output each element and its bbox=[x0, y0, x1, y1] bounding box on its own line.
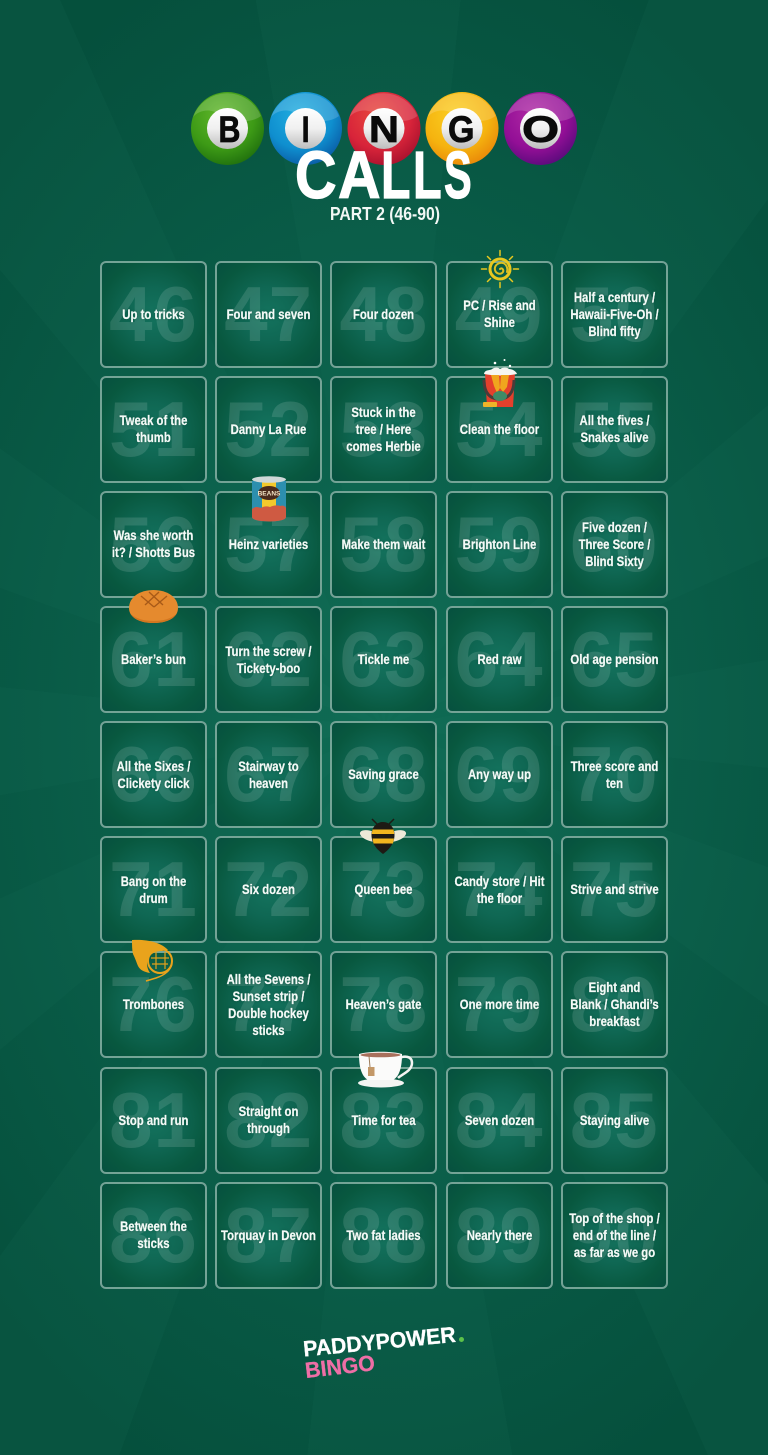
card 68 bbox=[330, 721, 437, 828]
card 48 bbox=[330, 260, 437, 368]
card 86: Between the bbox=[120, 1218, 187, 1234]
heading: calls: L bbox=[381, 138, 410, 213]
card 70: ten bbox=[606, 775, 623, 791]
card 83: 83 bbox=[340, 1076, 428, 1164]
card 63 bbox=[330, 606, 437, 713]
ball G bbox=[426, 92, 498, 165]
card 82 bbox=[215, 1067, 322, 1174]
card 77: Double hockey bbox=[228, 1005, 309, 1021]
icon: can of beans: BEANS bbox=[258, 490, 281, 498]
card 86: 86 bbox=[109, 1191, 198, 1279]
card 66: 66 bbox=[109, 730, 198, 818]
ball I: I bbox=[302, 110, 310, 151]
icon: french horn bbox=[132, 940, 172, 981]
icon: bread bun bbox=[129, 590, 178, 623]
card 55: Snakes alive bbox=[580, 429, 648, 445]
card 56: it? / Shotts Bus bbox=[112, 544, 195, 560]
card 76: Trombones bbox=[123, 996, 184, 1012]
card 49: Shine bbox=[484, 314, 515, 330]
card 66: Clickety click bbox=[118, 775, 189, 791]
card 78: 78 bbox=[340, 960, 428, 1048]
card 89 bbox=[446, 1182, 553, 1289]
card 74: Candy store / Hit bbox=[454, 873, 544, 889]
card 64 bbox=[446, 606, 553, 713]
card 79: 79 bbox=[455, 960, 543, 1048]
card 47 bbox=[215, 260, 322, 368]
card 80 bbox=[561, 951, 668, 1058]
logo dot bbox=[459, 1337, 464, 1342]
card 62: Tickety-boo bbox=[237, 660, 300, 676]
card 64: 64 bbox=[455, 615, 543, 703]
card 68: Saving grace bbox=[349, 766, 419, 782]
card 78 bbox=[330, 951, 437, 1058]
card 88: 88 bbox=[340, 1191, 428, 1279]
card 50: 50 bbox=[570, 270, 659, 358]
card 62 bbox=[215, 606, 322, 713]
card 59: Brighton Line bbox=[462, 536, 536, 552]
card 87 bbox=[215, 1182, 322, 1289]
card 61: Baker’s bun bbox=[121, 651, 186, 667]
card 57: Heinz varieties bbox=[229, 536, 308, 552]
card 50: Blind fifty bbox=[588, 322, 640, 338]
card 70: Three score and bbox=[570, 758, 658, 774]
card 60: Five dozen / bbox=[582, 519, 647, 535]
card 81: Stop and run bbox=[119, 1112, 188, 1128]
card 84 bbox=[446, 1067, 553, 1174]
card 89: 89 bbox=[455, 1191, 543, 1279]
card 73: Queen bee bbox=[355, 881, 413, 897]
card 60: 60 bbox=[570, 500, 659, 588]
card 83 bbox=[330, 1067, 437, 1174]
card 50: Hawaii-Five-Oh / bbox=[570, 306, 658, 322]
card 90: 90 bbox=[570, 1191, 659, 1279]
card 90: end of the line / bbox=[573, 1227, 656, 1243]
ball O: O bbox=[522, 109, 559, 151]
card 55: All the fives / bbox=[579, 412, 649, 428]
card 69 bbox=[446, 721, 553, 828]
card 47: 47 bbox=[224, 270, 313, 358]
card 82: 82 bbox=[224, 1076, 313, 1164]
card 67 bbox=[215, 721, 322, 828]
icon: bee bbox=[358, 819, 408, 854]
card 63: Tickle me bbox=[358, 651, 410, 667]
card 79: One more time bbox=[459, 996, 539, 1012]
card 60 bbox=[561, 491, 668, 598]
card 53: tree / Here bbox=[356, 421, 412, 437]
card 60: Three Score / bbox=[578, 536, 650, 552]
card 53 bbox=[330, 376, 437, 483]
card 72 bbox=[215, 836, 322, 943]
heading: calls: L bbox=[413, 139, 442, 213]
card 75: 75 bbox=[570, 845, 659, 933]
card 73 bbox=[330, 836, 437, 943]
ball N bbox=[348, 92, 420, 165]
card 81: 81 bbox=[109, 1076, 198, 1164]
card 77: sticks bbox=[253, 1022, 285, 1038]
card 61: 61 bbox=[109, 615, 198, 703]
card 69: Any way up bbox=[468, 766, 531, 782]
card 53: 53 bbox=[340, 385, 428, 473]
card 52: 52 bbox=[224, 385, 313, 473]
card 77: Sunset strip / bbox=[233, 988, 305, 1004]
card 71: drum bbox=[139, 890, 168, 906]
card 62: 62 bbox=[224, 615, 313, 703]
heading: calls bbox=[295, 138, 472, 213]
card 74: 74 bbox=[455, 845, 543, 933]
card 84: Seven dozen bbox=[464, 1112, 534, 1128]
card 69: 69 bbox=[455, 730, 543, 818]
card 53: comes Herbie bbox=[347, 438, 421, 454]
card 87: 87 bbox=[224, 1191, 313, 1279]
card 55: 55 bbox=[570, 385, 659, 473]
card 51 bbox=[100, 376, 207, 483]
card 58: 58 bbox=[340, 500, 428, 588]
ball B: B bbox=[218, 109, 240, 151]
card 66 bbox=[100, 721, 207, 828]
card 61 bbox=[100, 606, 207, 713]
card 82: Straight on bbox=[239, 1103, 299, 1119]
card 52 bbox=[215, 376, 322, 483]
card 75: Strive and strive bbox=[570, 881, 658, 897]
card 71: Bang on the bbox=[121, 873, 186, 889]
heading: calls: S bbox=[444, 138, 472, 212]
card 85: Staying alive bbox=[580, 1112, 649, 1128]
logo wordmark: bingo: BINGO bbox=[304, 1350, 376, 1383]
card 52: Danny La Rue bbox=[231, 421, 306, 437]
card 72: Six dozen bbox=[242, 881, 295, 897]
card 80: Blank / Ghandi’s bbox=[570, 996, 659, 1012]
card 58 bbox=[330, 491, 437, 598]
card 85: 85 bbox=[570, 1076, 659, 1164]
ball B bbox=[191, 92, 264, 165]
card 70 bbox=[561, 721, 668, 828]
card 85 bbox=[561, 1067, 668, 1174]
logo: paddypower bingo bbox=[302, 1322, 464, 1383]
card 65: 65 bbox=[570, 615, 659, 703]
card 86 bbox=[100, 1182, 207, 1289]
card 76 bbox=[100, 951, 207, 1058]
card 67: 67 bbox=[224, 730, 313, 818]
card 76: 76 bbox=[109, 960, 198, 1048]
heading: calls: A bbox=[338, 139, 381, 213]
card 53: Stuck in the bbox=[352, 404, 416, 420]
card 81 bbox=[100, 1067, 207, 1174]
card 80: breakfast bbox=[589, 1013, 640, 1029]
card 84: 84 bbox=[455, 1076, 543, 1164]
icon: bucket with gloves bbox=[483, 359, 517, 407]
card 67: Stairway to bbox=[238, 758, 299, 774]
card 77 bbox=[215, 951, 322, 1058]
ball O bbox=[504, 92, 577, 165]
card 57: 57 bbox=[224, 500, 313, 588]
icon: can of beans bbox=[252, 476, 286, 522]
card 62: Turn the screw / bbox=[226, 642, 312, 658]
logo wordmark: paddypower: PADDYPOWER bbox=[302, 1322, 457, 1361]
card 60: Blind Sixty bbox=[585, 553, 644, 569]
card 80: 80 bbox=[570, 960, 659, 1048]
card 54 bbox=[446, 376, 553, 483]
card 80: Eight and bbox=[588, 979, 640, 995]
heading: calls: C bbox=[295, 138, 337, 213]
card 77: 77 bbox=[224, 960, 313, 1048]
card 68: 68 bbox=[340, 730, 428, 818]
ball N: N bbox=[369, 109, 399, 150]
card 57 bbox=[215, 491, 322, 598]
card 51: Tweak of the bbox=[120, 412, 187, 428]
card 71: 71 bbox=[109, 845, 198, 933]
card 90: as far as we go bbox=[574, 1244, 655, 1260]
card 59 bbox=[446, 491, 553, 598]
card 47: Four and seven bbox=[227, 306, 311, 322]
card 54: Clean the floor bbox=[459, 421, 539, 437]
card 46: Up to tricks bbox=[122, 306, 185, 322]
card 74: the floor bbox=[476, 890, 522, 906]
card 50: Half a century / bbox=[574, 288, 655, 304]
card 90 bbox=[561, 1182, 668, 1289]
card 65 bbox=[561, 606, 668, 713]
card 50 bbox=[561, 260, 668, 368]
card 48: Four dozen bbox=[353, 306, 414, 322]
card 71 bbox=[100, 836, 207, 943]
card 59: 59 bbox=[455, 500, 543, 588]
card 82: through bbox=[247, 1120, 290, 1136]
card 67: heaven bbox=[249, 775, 288, 791]
card 86: sticks bbox=[137, 1235, 170, 1251]
card 78: Heaven’s gate bbox=[346, 996, 422, 1012]
card 87: Torquay in Devon bbox=[221, 1227, 316, 1243]
card 63: 63 bbox=[340, 615, 428, 703]
card 46 bbox=[100, 260, 207, 368]
card 54: 54 bbox=[455, 385, 543, 473]
card 64: Red raw bbox=[477, 651, 521, 667]
card 72: 72 bbox=[224, 845, 313, 933]
icon: sun bbox=[482, 250, 518, 288]
card 65: Old age pension bbox=[570, 651, 658, 667]
card 49: 49 bbox=[455, 270, 543, 358]
card 73: 73 bbox=[340, 845, 428, 933]
card 70: 70 bbox=[570, 730, 659, 818]
card 89: Nearly there bbox=[466, 1227, 532, 1243]
card 58: Make them wait bbox=[342, 536, 426, 552]
ball G: G bbox=[448, 109, 474, 150]
title: bingo balls and heading bbox=[191, 92, 577, 224]
card 88 bbox=[330, 1182, 437, 1289]
card 83: Time for tea bbox=[352, 1112, 416, 1128]
card 56: 56 bbox=[109, 500, 198, 588]
card 66: All the Sixes / bbox=[117, 758, 190, 774]
card 88: Two fat ladies bbox=[347, 1227, 421, 1243]
ball I bbox=[269, 92, 342, 165]
card 56 bbox=[100, 491, 207, 598]
card 49: PC / Rise and bbox=[463, 297, 535, 313]
card 49 bbox=[446, 260, 553, 368]
subheading: part 2: PART 2 (46-90) bbox=[330, 204, 440, 224]
card 48: 48 bbox=[340, 270, 428, 358]
card 74 bbox=[446, 836, 553, 943]
card 55 bbox=[561, 376, 668, 483]
card 77: All the Sevens / bbox=[227, 971, 311, 987]
card 75 bbox=[561, 836, 668, 943]
card 56: Was she worth bbox=[114, 527, 193, 543]
icon: teacup bbox=[358, 1052, 412, 1088]
card 51: thumb bbox=[136, 429, 171, 445]
card 90: Top of the shop / bbox=[569, 1210, 660, 1226]
card 79 bbox=[446, 951, 553, 1058]
card 51: 51 bbox=[109, 385, 198, 473]
card 46: 46 bbox=[109, 270, 198, 358]
